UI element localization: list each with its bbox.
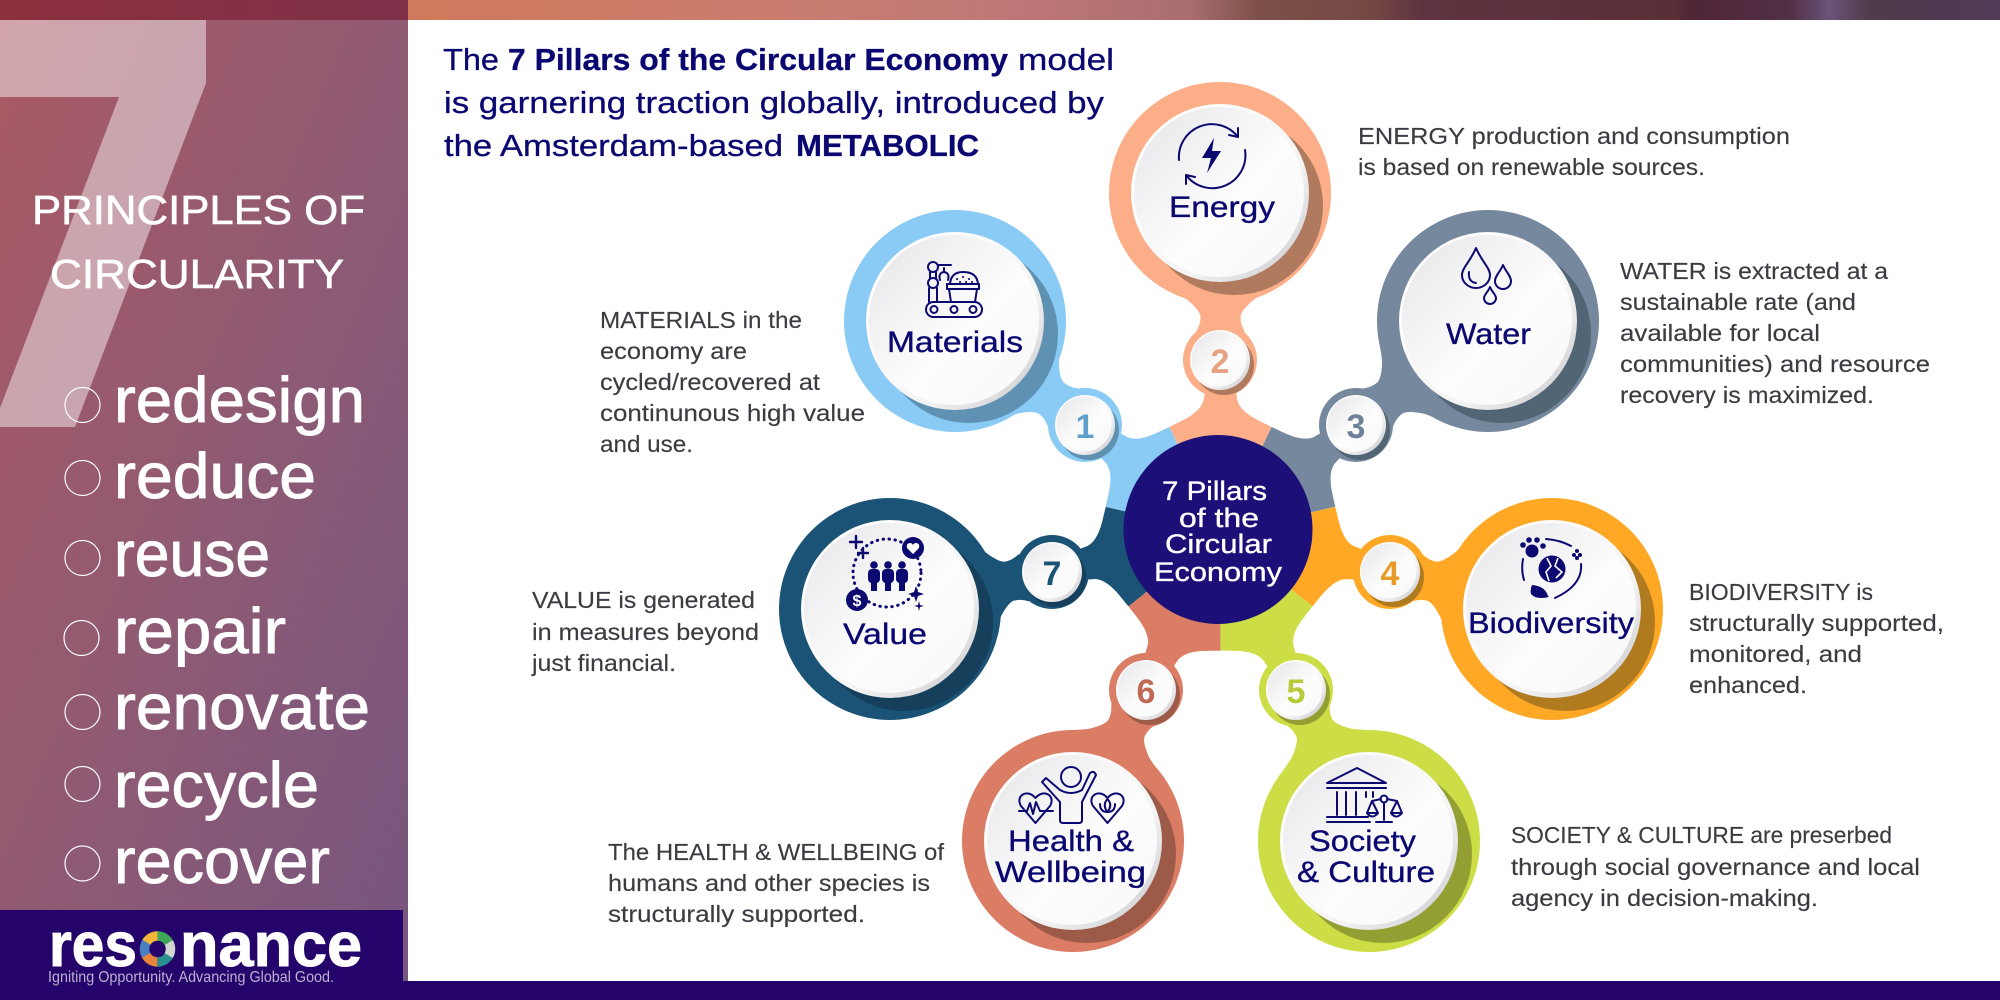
description: biodiversity: BIODIVERSITY is	[1689, 579, 1873, 605]
headline: 7 Pillars of the Circular Economy	[508, 42, 1009, 77]
icon: conveyor with robot arm	[926, 262, 982, 317]
central hub	[1124, 435, 1312, 624]
panel heading: PRINCIPLES OF	[32, 187, 365, 233]
principles list: reuse	[114, 518, 270, 590]
number badge 1: 1	[1076, 408, 1094, 446]
central hub: Economy	[1154, 557, 1283, 587]
node 1: materials: Materials	[887, 326, 1023, 359]
panel: principles of circularity	[0, 0, 408, 1000]
description: energy	[1358, 123, 1790, 180]
principles list: renovate	[114, 671, 370, 743]
description: biodiversity: enhanced.	[1689, 672, 1807, 698]
pillar 5 connector: society	[1171, 509, 1400, 827]
number badge 6: 6	[1137, 673, 1155, 711]
description: energy: ENERGY production and consumption	[1358, 123, 1790, 149]
panel heading	[32, 187, 365, 297]
principles list	[64, 364, 370, 897]
icon: people with heart and dollar	[846, 536, 924, 611]
top strip	[408, 0, 2000, 20]
number badge 7	[1022, 542, 1086, 607]
number badge 5: 5	[1287, 673, 1305, 711]
logo ring icon	[144, 936, 170, 962]
icon: court building and scales	[1327, 768, 1402, 822]
description: society and culture: agency in decision-making.	[1511, 885, 1818, 911]
description: value: just financial.	[531, 650, 676, 676]
description: water	[1620, 258, 1930, 408]
description: society and culture: through social governance and local	[1511, 854, 1920, 880]
description: value: in measures beyond	[532, 619, 759, 645]
central hub: Circular	[1165, 529, 1272, 559]
number badge 3	[1326, 395, 1390, 460]
number badge 4	[1360, 542, 1424, 607]
icon: globe with paw and leaf	[1520, 537, 1582, 598]
pillar 7 connector: value	[916, 479, 1233, 653]
icon: person with hearts	[1019, 767, 1124, 823]
node 5: society and culture: Society	[1309, 825, 1416, 858]
bottom bar	[0, 981, 2000, 1000]
description: biodiversity	[1689, 579, 1944, 698]
node 5: society and culture	[1258, 653, 1480, 952]
headline: is garnering traction globally, introduced by	[444, 85, 1105, 120]
description: water: recovery is maximized.	[1620, 382, 1874, 408]
central hub: of the	[1179, 503, 1259, 533]
logo: resonance	[0, 910, 403, 1000]
headline	[443, 42, 1114, 163]
headline: The	[443, 42, 499, 77]
node 6: health and wellbeing: Health &	[1008, 825, 1134, 858]
pillar 6 connector: health	[1041, 509, 1270, 827]
description: water: sustainable rate (and	[1620, 289, 1856, 315]
description: biodiversity: structurally supported,	[1689, 610, 1944, 636]
number badge 7: 7	[1043, 555, 1061, 593]
big translucent seven	[0, 20, 206, 427]
number badge 3: 3	[1347, 408, 1365, 446]
description: health and wellbeing: The HEALTH & WELLBEING of	[608, 839, 944, 865]
description: value	[531, 587, 759, 676]
node 5: society and culture: & Culture	[1297, 856, 1435, 889]
central hub: 7 Pillars	[1162, 476, 1267, 506]
panel heading: CIRCULARITY	[50, 251, 344, 297]
description: health and wellbeing: structurally supported.	[608, 901, 865, 927]
description: materials: MATERIALS in the	[600, 307, 802, 333]
principles list: reduce	[114, 440, 316, 512]
description: water: available for local	[1620, 320, 1820, 346]
description: materials: and use.	[600, 431, 693, 457]
icon: water drops	[1462, 248, 1511, 304]
number badge 1	[1055, 395, 1119, 460]
node 3: water	[1319, 210, 1599, 462]
logo: resonance: nance	[180, 911, 362, 980]
description: materials: cycled/recovered at	[600, 369, 820, 395]
icon: renewable energy bolt	[1179, 124, 1245, 188]
description: society and culture	[1511, 822, 1920, 911]
principles list: repair	[114, 595, 286, 667]
node 2: energy: Energy	[1169, 191, 1275, 224]
node 3: water: Water	[1446, 318, 1531, 351]
headline: the Amsterdam-based	[444, 128, 783, 163]
description: water: communities) and resource	[1620, 351, 1930, 377]
logo: resonance: Igniting Opportunity. Advancing Global Good.	[48, 969, 334, 986]
principles list: recover	[114, 825, 330, 897]
description: health and wellbeing	[608, 839, 944, 927]
description: energy: is based on renewable sources.	[1358, 154, 1705, 180]
node 6: health and wellbeing: Wellbeing	[995, 856, 1146, 889]
number badge 2	[1190, 330, 1254, 395]
headline: METABOLIC	[796, 128, 979, 163]
node 1: materials	[844, 210, 1122, 462]
pillar 3 connector: water	[1186, 303, 1489, 576]
pillar 1 connector: materials	[952, 303, 1255, 576]
description: water: WATER is extracted at a	[1620, 258, 1889, 284]
pillar 2 connector: energy	[1166, 233, 1276, 533]
description: value: VALUE is generated	[532, 587, 755, 613]
node 7: value	[779, 498, 1089, 720]
description: health and wellbeing: humans and other species is	[608, 870, 930, 896]
icon: people with heart and dollar: $	[853, 593, 862, 610]
node 2: energy	[1109, 82, 1331, 397]
node 4: biodiversity: Biodiversity	[1468, 607, 1634, 640]
number badge 2: 2	[1211, 343, 1229, 381]
node 6: health and wellbeing	[962, 653, 1184, 952]
number badge 5	[1266, 660, 1330, 725]
description: materials: economy are	[600, 338, 747, 364]
principles list: redesign	[114, 364, 365, 436]
description: materials	[600, 307, 865, 457]
description: biodiversity: monitored, and	[1689, 641, 1862, 667]
description: society and culture: SOCIETY & CULTURE are preserbed	[1511, 822, 1892, 848]
diagram: seven pillars	[779, 82, 1663, 952]
node 7: value: Value	[843, 618, 927, 651]
logo: resonance: res	[49, 911, 137, 980]
number badge 4: 4	[1381, 555, 1400, 593]
pillar 4 connector: biodiversity	[1208, 479, 1525, 653]
headline: model	[1018, 42, 1114, 77]
principles list: recycle	[114, 749, 319, 821]
number badge 6	[1116, 660, 1180, 725]
node 4: biodiversity	[1353, 498, 1663, 720]
description: materials: continunous high value	[600, 400, 865, 426]
